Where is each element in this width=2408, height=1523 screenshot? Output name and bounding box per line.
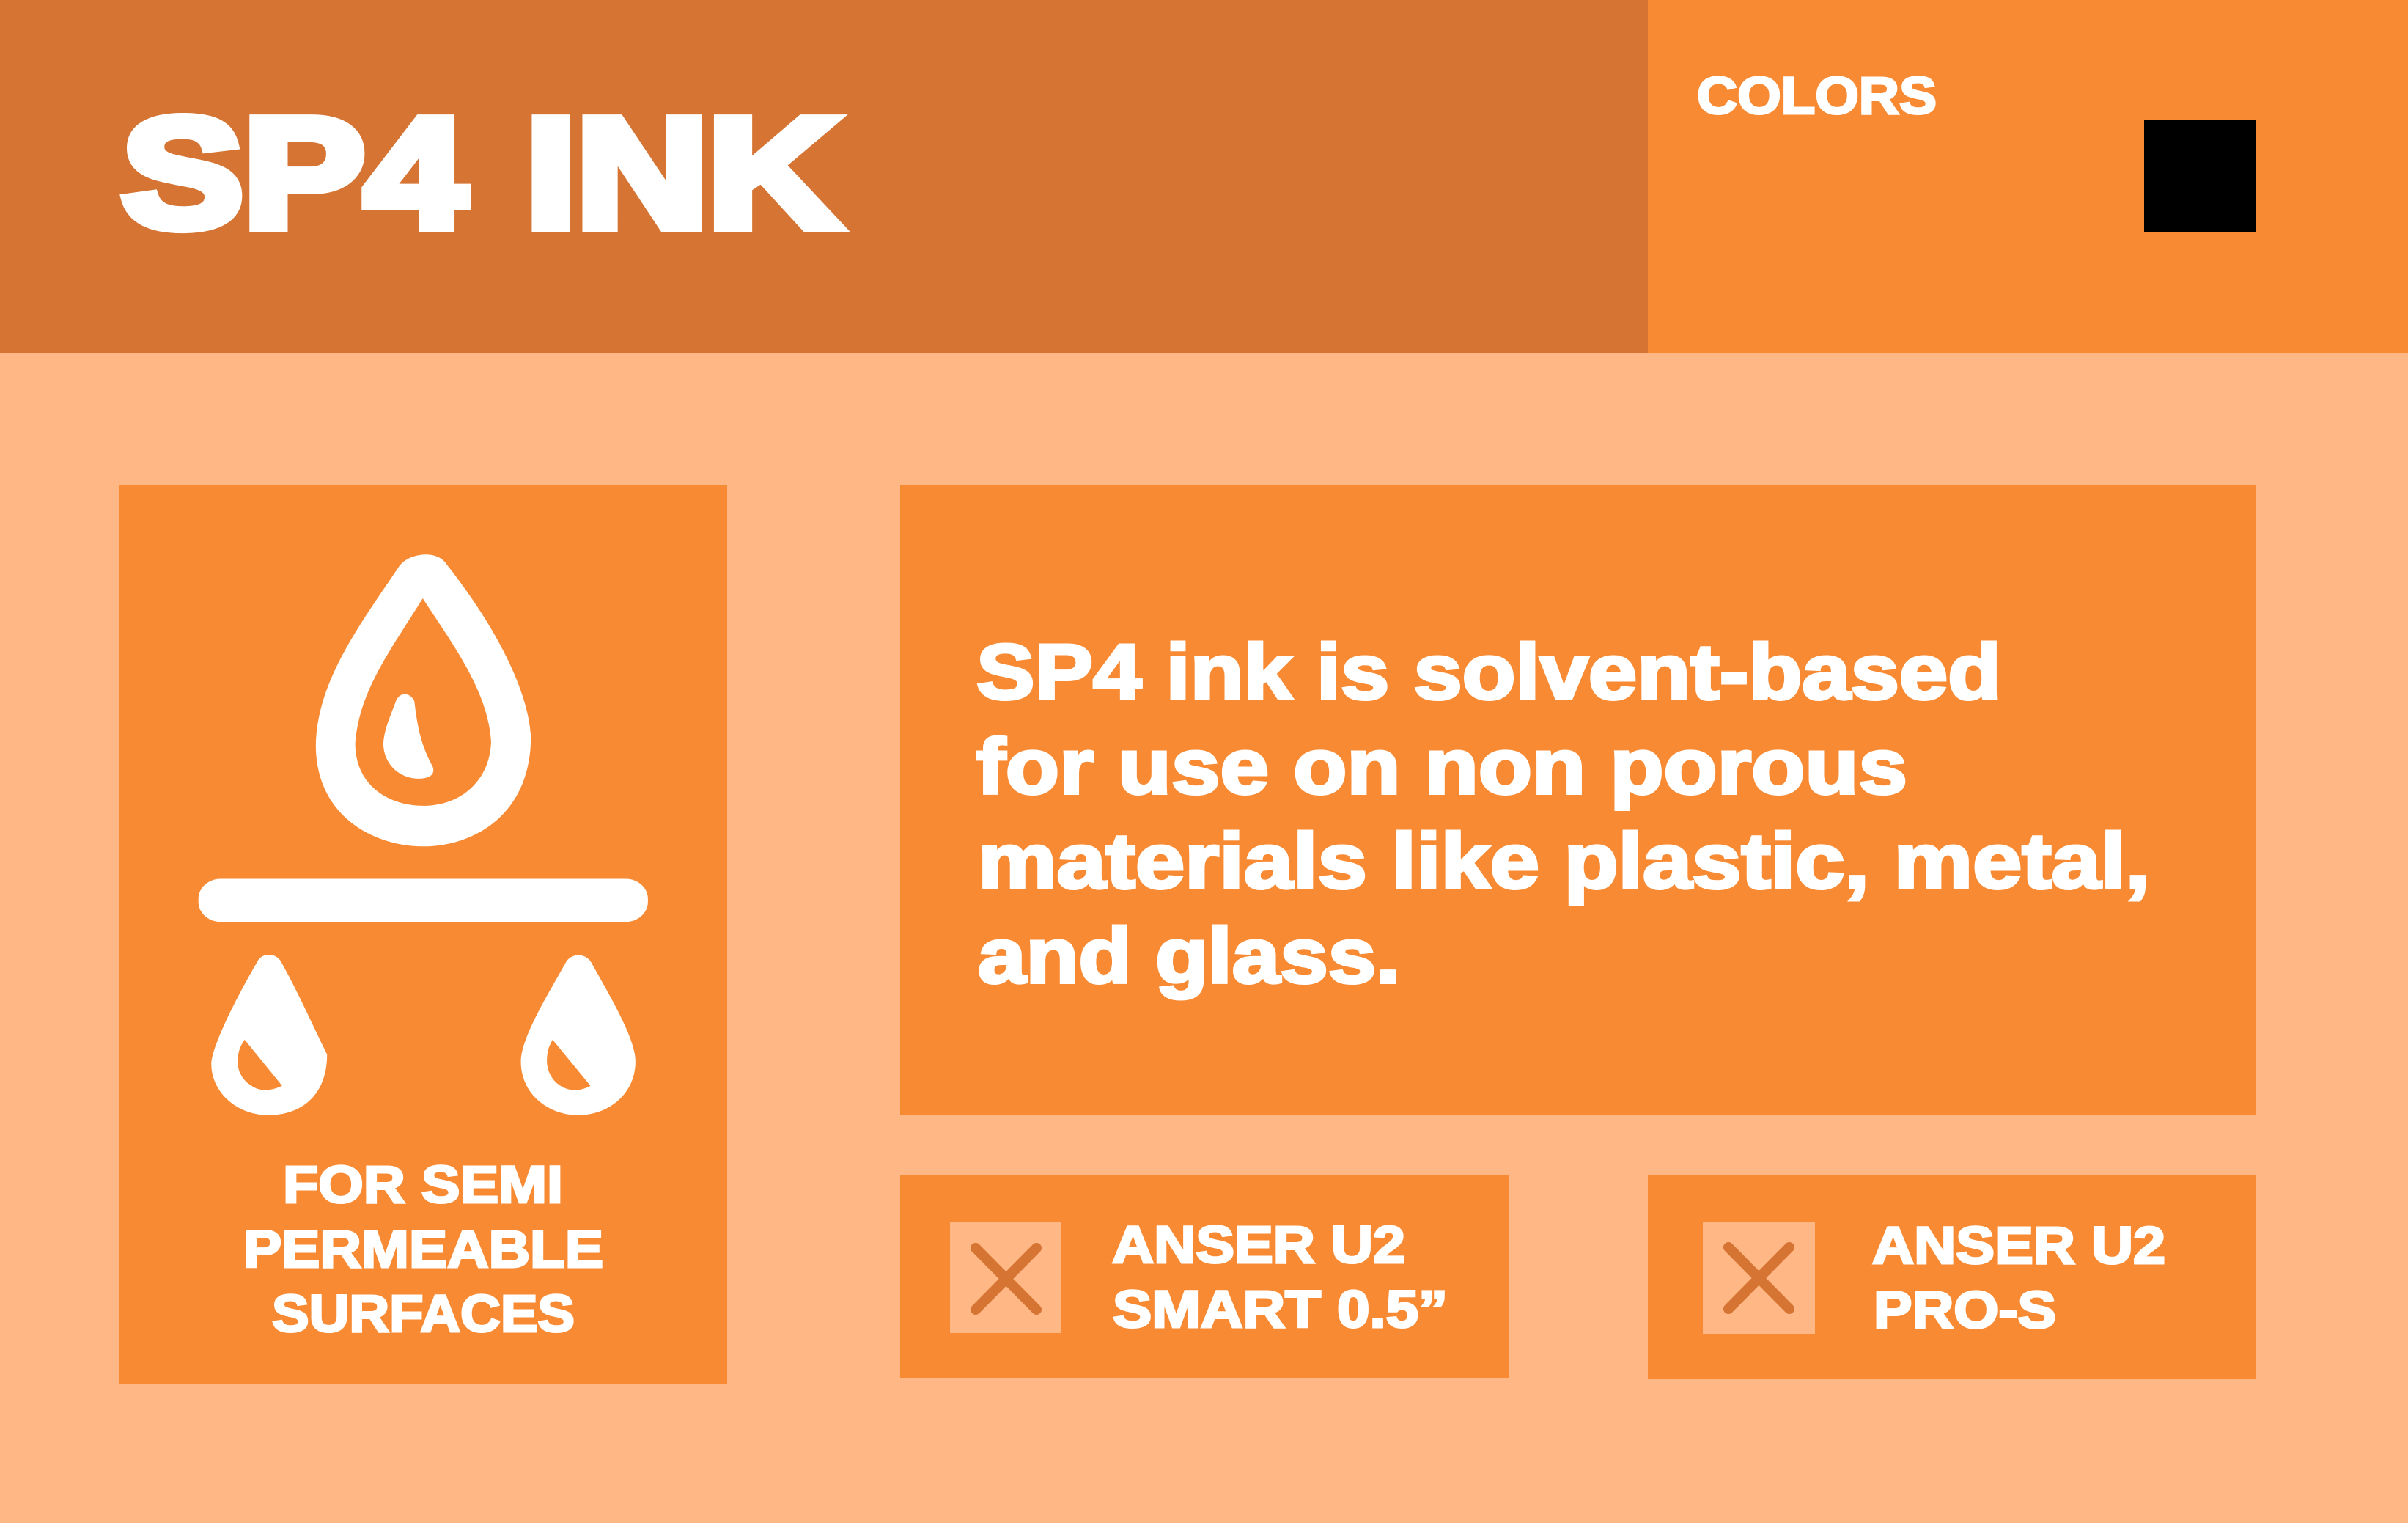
icon: cross box xyxy=(950,1222,1061,1333)
label xyxy=(1112,1216,1448,1339)
description text: and glass. xyxy=(978,911,1400,999)
title xyxy=(122,86,839,260)
panel: description xyxy=(900,485,2256,1115)
panel: surface type xyxy=(119,485,727,1384)
surface label: PERMEABLE xyxy=(243,1221,603,1279)
surface label: SURFACES xyxy=(272,1285,575,1343)
label: ANSER U2 xyxy=(1112,1216,1405,1274)
color swatch: black xyxy=(2144,120,2256,232)
icon: inner highlight xyxy=(383,694,433,779)
label: ANSER U2 xyxy=(1872,1217,2165,1275)
panel: incompatible with Anser U2 Smart xyxy=(900,1175,1509,1378)
icon: ink drops penetrating surface xyxy=(199,554,648,1115)
icon: large drop xyxy=(316,554,531,846)
panel: colors xyxy=(1648,0,2408,353)
surface label: FOR SEMI xyxy=(283,1156,563,1214)
title: INK xyxy=(526,86,839,260)
description text: materials like plastic, metal, xyxy=(978,817,2150,905)
description text xyxy=(976,628,2150,999)
colors heading: COLORS xyxy=(1697,67,1937,125)
panel: incompatible with Anser U2 Pro-S xyxy=(1648,1175,2256,1379)
label: PRO-S xyxy=(1874,1282,2056,1340)
label xyxy=(1872,1217,2165,1340)
icon: cross box xyxy=(1703,1222,1815,1334)
surface label xyxy=(243,1156,603,1343)
icon: left small drop xyxy=(211,955,327,1115)
header: title band xyxy=(0,0,1648,353)
icon: surface bar xyxy=(199,879,648,922)
label: SMART 0.5” xyxy=(1113,1281,1448,1339)
title: SP4 xyxy=(122,86,466,260)
description text: for use on non porous xyxy=(976,722,1907,810)
icon: right small drop xyxy=(521,955,636,1115)
description text: SP4 ink is solvent-based xyxy=(976,628,2001,716)
